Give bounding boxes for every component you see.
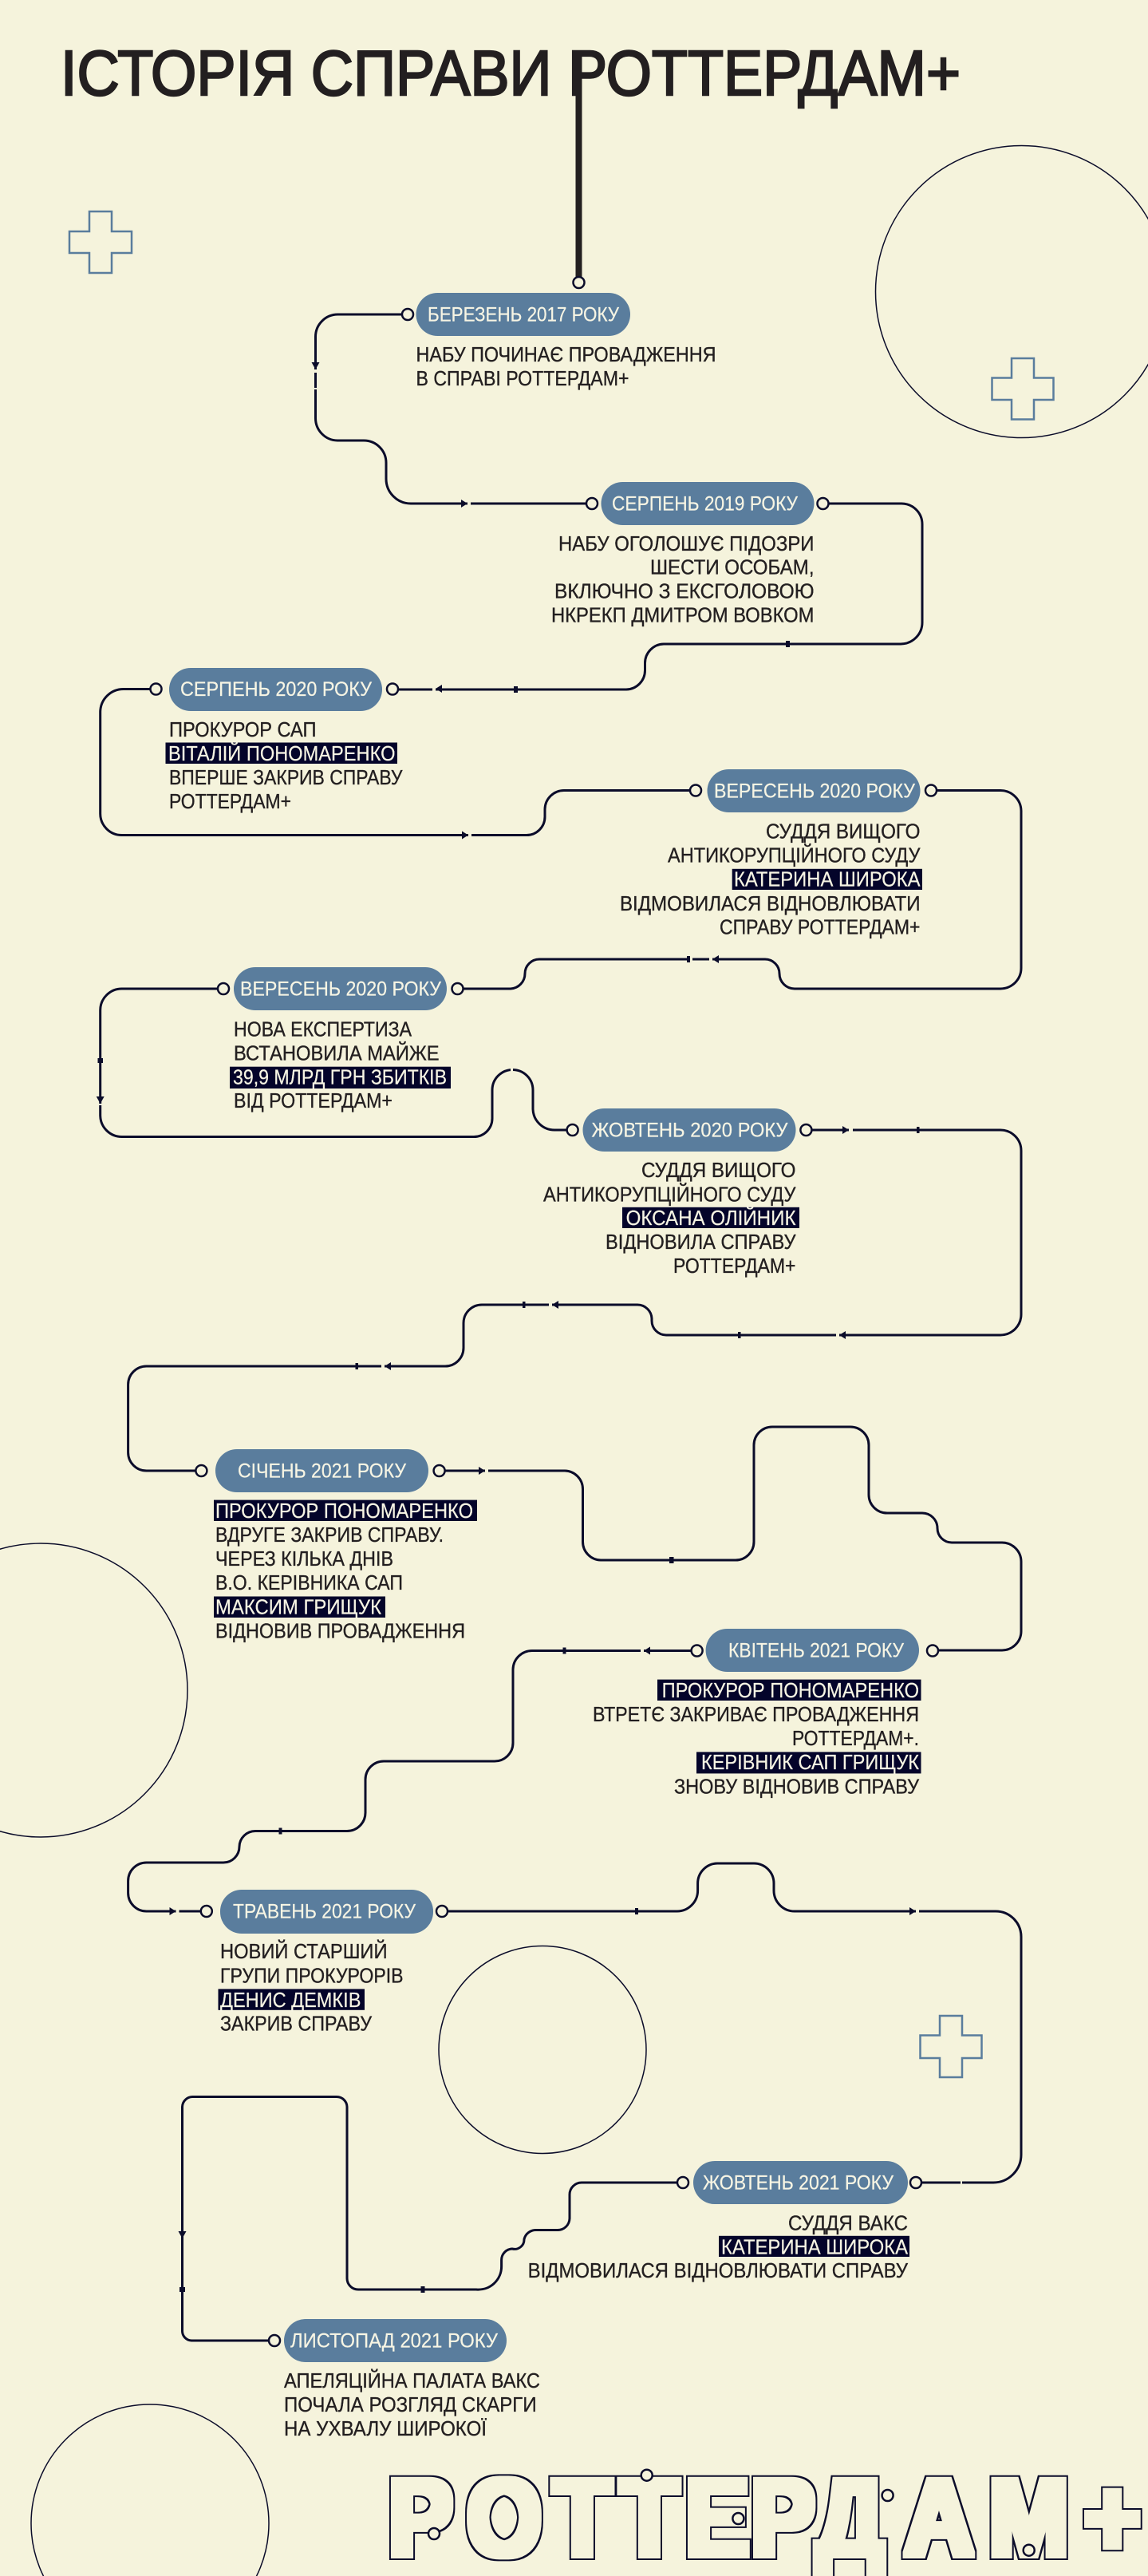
event: January 2021: ВІДНОВИВ ПРОВАДЖЕННЯ	[215, 1618, 465, 1642]
event: April 2021: ЗНОВУ ВІДНОВИВ СПРАВУ	[674, 1775, 919, 1799]
event: January 2021: В.О. КЕРІВНИКА САП	[215, 1570, 403, 1594]
decorative circle centre	[439, 1946, 646, 2153]
decorative circle top right	[876, 145, 1148, 437]
event: August 2020	[150, 668, 403, 813]
event: September 2020 second: 39,9 МЛРД ГРН ЗБИТКІВ	[233, 1065, 447, 1089]
event: March 2017	[402, 277, 716, 390]
event: January 2021: МАКСИМ ГРИЩУК	[215, 1594, 381, 1618]
event: September 2020 first	[620, 769, 937, 938]
event: April 2021: РОТТЕРДАМ+.	[792, 1726, 919, 1750]
connector: October 2020 to January 2021	[128, 1126, 1021, 1471]
connector: September 2020 to September 2020 second	[464, 790, 1021, 989]
event: October 2021: СУДДЯ ВАКС	[788, 2211, 908, 2234]
event: October 2021: ВІДМОВИЛАСЯ ВІДНОВЛЮВАТИ СПРАВУ	[528, 2258, 908, 2282]
event: September 2020 second: ВЕРЕСЕНЬ 2020 РОКУ	[240, 978, 441, 1001]
event: November 2021: НА УХВАЛУ ШИРОКОЇ	[284, 2416, 487, 2440]
event: September 2020 first: КАТЕРИНА ШИРОКА	[734, 867, 921, 891]
event: September 2020 second: НОВА ЕКСПЕРТИЗА	[234, 1017, 412, 1041]
connector: August 2019 to August 2020	[399, 504, 922, 693]
event: August 2019: СЕРПЕНЬ 2019 РОКУ	[612, 493, 798, 516]
icon: plus lower right	[921, 2016, 981, 2077]
event: January 2021: ПРОКУРОР ПОНОМАРЕНКО	[215, 1499, 473, 1523]
event: April 2021: ВТРЕТЄ ЗАКРИВАЄ ПРОВАДЖЕННЯ	[593, 1702, 919, 1726]
event: May 2021: ЗАКРИВ СПРАВУ	[220, 2012, 372, 2036]
timeline start thick line	[576, 51, 582, 277]
title: ІСТОРІЯ СПРАВИ РОТТЕРДАМ+	[61, 38, 961, 109]
event: April 2021: КЕРІВНИК САП ГРИЩУК	[701, 1750, 919, 1774]
event: October 2020: РОТТЕРДАМ+	[673, 1254, 796, 1278]
connector: January 2021 to April 2021	[445, 1427, 1021, 1650]
icon: plus top left	[69, 211, 132, 273]
event: May 2021: НОВИЙ СТАРШИЙ	[220, 1939, 388, 1963]
connector: August 2020 to September 2020	[101, 689, 689, 840]
connector: May 2021 to October 2021	[448, 1863, 1021, 2186]
event: September 2020 first: АНТИКОРУПЦІЙНОГО СУДУ	[668, 843, 921, 867]
icon: plus inside circle	[992, 358, 1053, 420]
event: August 2020: ВІТАЛІЙ ПОНОМАРЕНКО	[168, 741, 396, 765]
event: October 2020: ЖОВТЕНЬ 2020 РОКУ	[592, 1119, 788, 1141]
event: October 2021	[528, 2161, 921, 2282]
wordmark: Роттердам+ outline: РОТТЕРДАМ+	[389, 2457, 1140, 2576]
event: September 2020 second	[218, 967, 463, 1112]
event: September 2020 second: ВСТАНОВИЛА МАЙЖЕ	[234, 1041, 440, 1065]
event: September 2020 first: СПРАВУ РОТТЕРДАМ+	[720, 915, 921, 938]
event: September 2020 first: ВІДМОВИЛАСЯ ВІДНОВЛЮВАТИ	[620, 891, 921, 915]
connector: March 2017 to August 2019	[311, 314, 586, 508]
event: August 2019: НАБУ ОГОЛОШУЄ ПІДОЗРИ	[558, 531, 814, 555]
event: August 2019	[551, 482, 828, 627]
event: April 2021: ПРОКУРОР ПОНОМАРЕНКО	[662, 1678, 919, 1702]
event: April 2021	[593, 1629, 938, 1799]
event: August 2019: ВКЛЮЧНО З ЕКСГОЛОВОЮ	[554, 579, 814, 603]
event: August 2019: ШЕСТИ ОСОБАМ,	[650, 555, 814, 579]
connector: October 2021 to November 2021	[179, 2096, 677, 2341]
event: October 2020: СУДДЯ ВИЩОГО	[641, 1158, 796, 1182]
event: May 2021: ДЕНИС ДЕМКІВ	[220, 1988, 361, 2012]
decorative circle bottom left	[31, 2404, 269, 2576]
event: October 2020: АНТИКОРУПЦІЙНОГО СУДУ	[543, 1183, 796, 1207]
event: August 2020: СЕРПЕНЬ 2020 РОКУ	[180, 678, 372, 701]
event: October 2021: КАТЕРИНА ШИРОКА	[721, 2234, 909, 2258]
event: March 2017: НАБУ ПОЧИНАЄ ПРОВАДЖЕННЯ	[416, 342, 716, 366]
connector: September 2020 to October 2020	[97, 989, 566, 1137]
event: April 2021: КВІТЕНЬ 2021 РОКУ	[728, 1639, 904, 1661]
event: October 2021: ЖОВТЕНЬ 2021 РОКУ	[703, 2172, 894, 2195]
decorative circle left	[0, 1543, 187, 1837]
event: January 2021: ЧЕРЕЗ КІЛЬКА ДНІВ	[215, 1547, 393, 1570]
event: September 2020 second: ВІД РОТТЕРДАМ+	[234, 1088, 393, 1112]
event: November 2021: ПОЧАЛА РОЗГЛЯД СКАРГИ	[284, 2392, 537, 2416]
event: November 2021: АПЕЛЯЦІЙНА ПАЛАТА ВАКС	[284, 2369, 540, 2392]
event: May 2021	[201, 1890, 448, 2036]
event: August 2020: ПРОКУРОР САП	[169, 717, 316, 741]
event: May 2021: ГРУПИ ПРОКУРОРІВ	[220, 1963, 404, 1987]
event: October 2020	[543, 1108, 811, 1278]
event: March 2017: В СПРАВІ РОТТЕРДАМ+	[416, 366, 629, 390]
event: January 2021: СІЧЕНЬ 2021 РОКУ	[238, 1460, 406, 1483]
event: January 2021	[195, 1449, 477, 1642]
event: August 2019: НКРЕКП ДМИТРОМ ВОВКОМ	[551, 603, 814, 627]
event: January 2021: ВДРУГЕ ЗАКРИВ СПРАВУ.	[215, 1523, 444, 1547]
event: October 2020: ОКСАНА ОЛІЙНИК	[626, 1206, 796, 1230]
event: September 2020 first: СУДДЯ ВИЩОГО	[766, 819, 921, 843]
event: August 2020: ВПЕРШЕ ЗАКРИВ СПРАВУ	[169, 765, 403, 789]
event: October 2020: ВІДНОВИЛА СПРАВУ	[606, 1230, 796, 1254]
connector: April 2021 to May 2021	[128, 1647, 691, 1915]
event: November 2021	[269, 2319, 540, 2440]
event: November 2021: ЛИСТОПАД 2021 РОКУ	[290, 2330, 498, 2353]
event: March 2017: БЕРЕЗЕНЬ 2017 РОКУ	[428, 303, 619, 326]
event: August 2020: РОТТЕРДАМ+	[169, 789, 291, 813]
event: September 2020 first: ВЕРЕСЕНЬ 2020 РОКУ	[714, 780, 915, 803]
event: May 2021: ТРАВЕНЬ 2021 РОКУ	[233, 1901, 416, 1923]
